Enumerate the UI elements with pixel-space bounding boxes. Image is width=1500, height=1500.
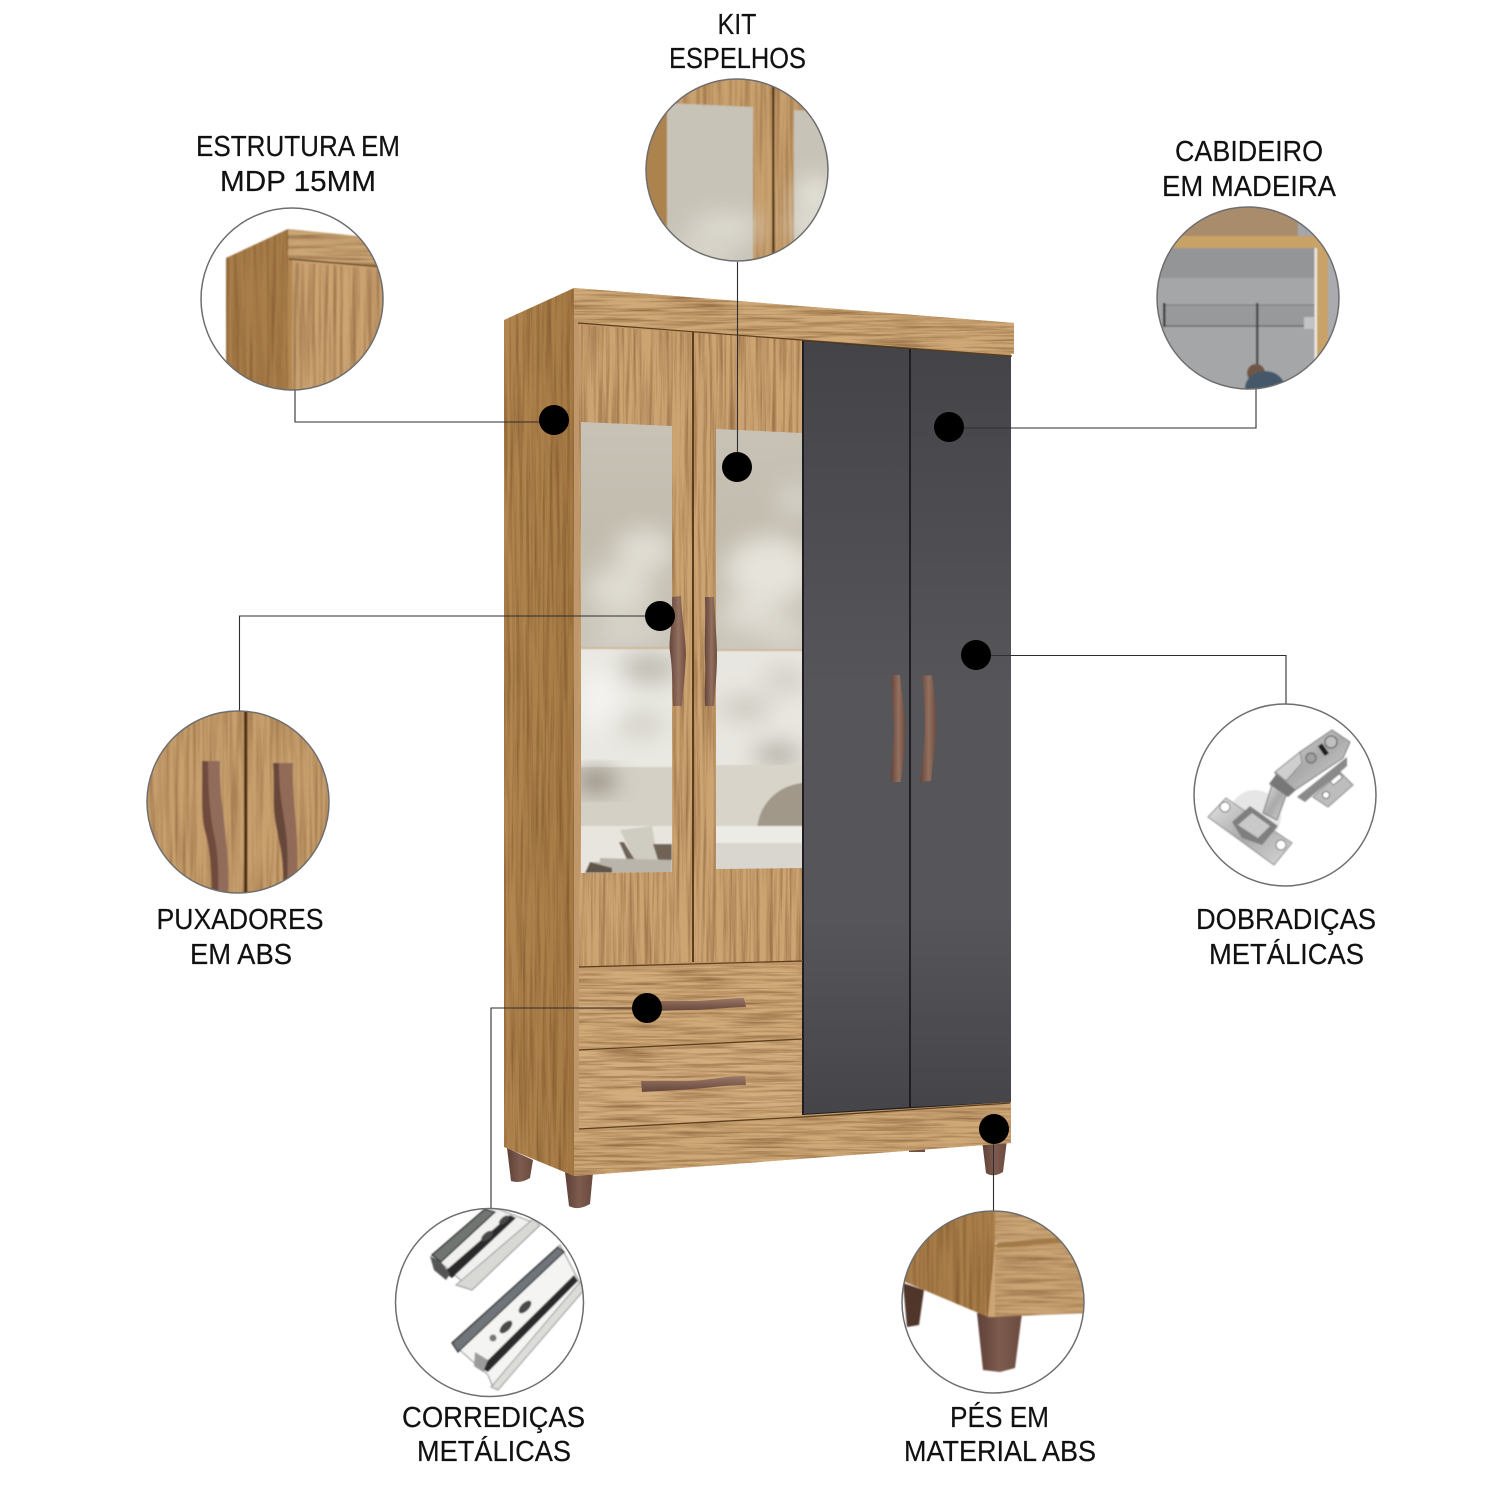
- heading: MDP 15MM: [220, 166, 376, 198]
- heading: [196, 131, 400, 198]
- wood door seam: [692, 332, 694, 962]
- heading: ESTRUTURA EM: [196, 131, 400, 163]
- right foot: [982, 1140, 1007, 1175]
- door handle 4: [920, 675, 936, 782]
- panel: kit espelhos: [645, 9, 833, 264]
- heading: [156, 904, 324, 971]
- plinth: [574, 1103, 1011, 1176]
- leader lines: [240, 262, 1286, 1212]
- detail photo: mirrors: [645, 78, 833, 264]
- second wood door: [694, 333, 803, 962]
- ring: [902, 1211, 1084, 1393]
- heading: [1162, 136, 1337, 203]
- detail photo: foot: [903, 1212, 1084, 1373]
- edges: [578, 323, 1012, 1129]
- panel: cabideiro em madeira: [1156, 140, 1340, 390]
- heading: EM MADEIRA: [1162, 171, 1337, 203]
- panel: estrutura em MDP: [196, 131, 400, 395]
- side panel: [504, 288, 574, 1176]
- heading: [1196, 904, 1376, 971]
- ring: [1157, 207, 1339, 389]
- wardrobe: [504, 288, 1014, 1208]
- panel: dobradiças metálicas: [1194, 704, 1376, 971]
- door handle 2: [705, 597, 717, 706]
- door handle 1: [670, 596, 686, 706]
- front left foot: [565, 1172, 593, 1208]
- ring: [147, 711, 329, 893]
- detail photo: hinge: [1208, 730, 1353, 865]
- heading: PUXADORES: [156, 904, 324, 936]
- drawer handle 1: [650, 998, 746, 1011]
- heading: [904, 1401, 1096, 1468]
- heading: PÉS EM: [950, 1401, 1049, 1434]
- heading: CABIDEIRO: [1175, 136, 1323, 168]
- rear support foot: [909, 1146, 925, 1152]
- back left foot: [507, 1148, 533, 1182]
- detail photo: drawer rails: [430, 1206, 584, 1390]
- ring: [1194, 704, 1376, 886]
- heading: CORREDIÇAS: [402, 1402, 585, 1434]
- heading: ESPELHOS: [669, 43, 806, 75]
- heading: MATERIAL ABS: [904, 1436, 1096, 1468]
- detail photo: handles: [145, 710, 331, 896]
- panel: puxadores em ABS: [145, 710, 331, 971]
- ring: [201, 208, 383, 390]
- heading: EM ABS: [190, 939, 292, 971]
- left mirror: [581, 422, 672, 873]
- drawer handle 2: [641, 1076, 746, 1092]
- black door 1: [804, 341, 909, 1114]
- front frame: [574, 288, 1014, 1176]
- heading: [402, 1402, 585, 1468]
- door handle 3: [891, 675, 905, 782]
- ring: [646, 79, 828, 261]
- left wood door: [579, 325, 692, 967]
- heading: METÁLICAS: [1209, 938, 1364, 971]
- detail photo: corner: [226, 229, 395, 395]
- detail photo: hanger rail: [1158, 208, 1338, 388]
- panel: pés em material ABS: [895, 1205, 1096, 1468]
- heading: KIT: [718, 9, 757, 41]
- right mirror: [716, 429, 802, 869]
- heading: METÁLICAS: [417, 1435, 571, 1468]
- black door 2: [911, 349, 1011, 1107]
- ring: [396, 1208, 584, 1396]
- second drawer: [579, 1040, 803, 1128]
- heading: DOBRADIÇAS: [1196, 904, 1376, 936]
- infographic: wardrobe features: [146, 14, 1377, 1462]
- marker dots: [539, 405, 1009, 1144]
- top band: [574, 288, 1014, 354]
- heading: [669, 9, 806, 75]
- panel: corrediças metálicas: [396, 1206, 585, 1468]
- first drawer: [579, 963, 803, 1048]
- black door backing: [802, 340, 1011, 1115]
